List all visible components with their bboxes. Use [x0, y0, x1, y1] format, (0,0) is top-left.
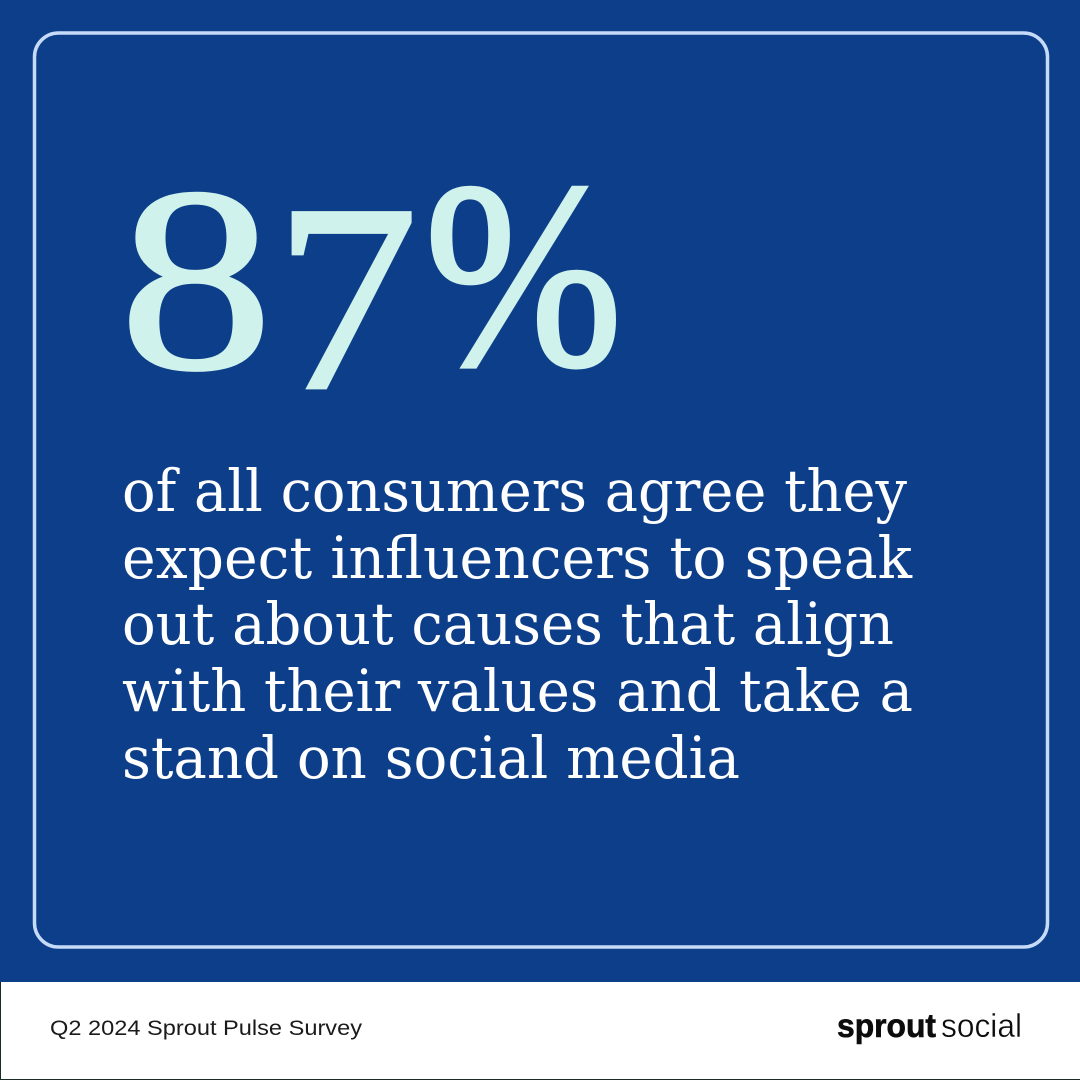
body text [122, 457, 913, 792]
footer source text: Q2 2024 Sprout Pulse Survey [50, 1016, 362, 1040]
body text: out about causes that align [122, 590, 894, 658]
logo: sprout social: sprout [837, 1007, 936, 1044]
logo: sprout social: social [941, 1007, 1022, 1044]
headline statistic: % [424, 129, 622, 422]
headline statistic [119, 129, 622, 447]
logo: sprout social [837, 1007, 1022, 1044]
body text: expect influencers to speak [122, 524, 913, 592]
headline statistic: 8 [119, 134, 273, 425]
body text: with their values and take a [122, 657, 913, 725]
body text: of all consumers agree they [122, 457, 907, 525]
footer strip [0, 982, 1080, 1080]
headline statistic: 7 [274, 150, 419, 447]
rounded frame [34, 33, 1048, 947]
image edge border [0, 982, 1080, 1080]
body text: stand on social media [122, 724, 740, 792]
